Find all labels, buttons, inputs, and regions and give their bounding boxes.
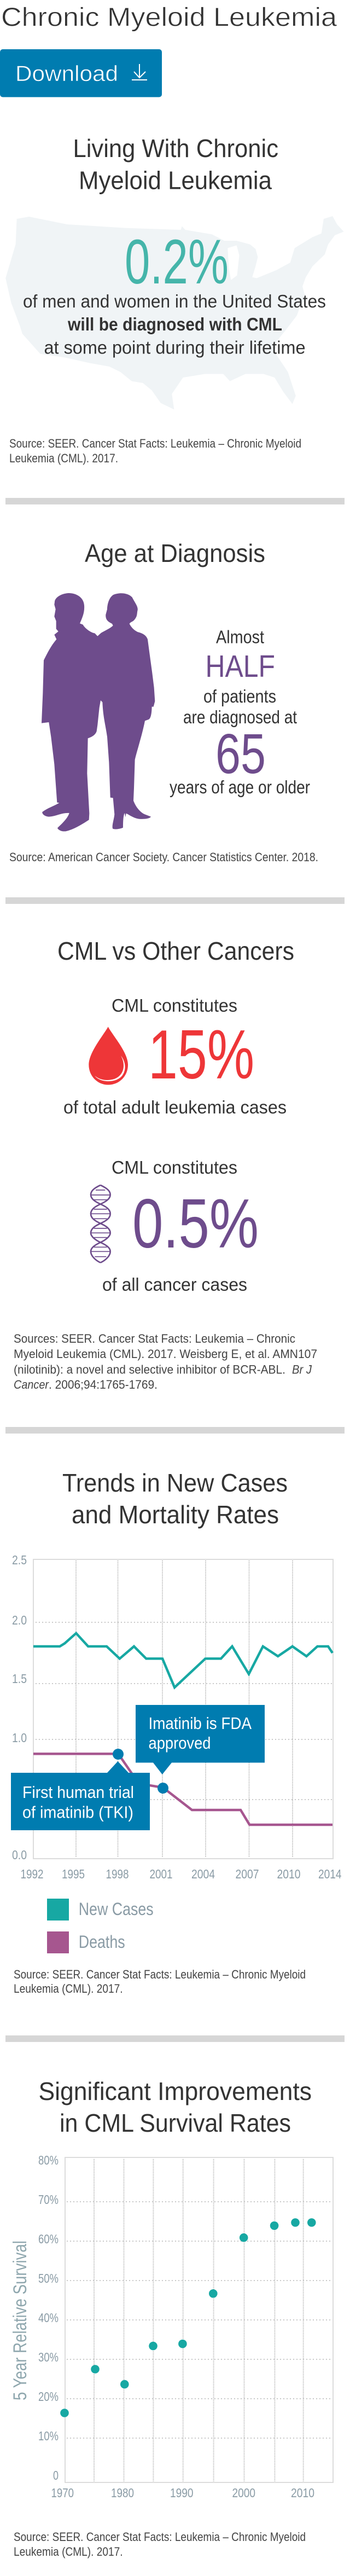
legend bbox=[47, 1899, 154, 1953]
label: CML constitutes: CML constitutes bbox=[112, 1157, 237, 1177]
x axis labels: 1980 bbox=[111, 2486, 134, 2500]
line: deaths bbox=[33, 1754, 332, 1825]
y axis labels: 0 bbox=[53, 2468, 59, 2482]
heading: survival rates bbox=[38, 2077, 312, 2137]
y axis labels: 1.0 bbox=[12, 1731, 27, 1745]
y axis labels: 40% bbox=[38, 2311, 59, 2325]
legend: New Cases bbox=[79, 1899, 154, 1919]
callout: first human trial: First human trial bbox=[22, 1783, 134, 1802]
x axis labels: 2004 bbox=[191, 1867, 215, 1881]
icon: silhouette of older couple bbox=[42, 593, 155, 831]
x axis labels: 2001 bbox=[150, 1867, 173, 1881]
caption: adult leukemia cases: of total adult leukemia cases bbox=[63, 1097, 287, 1117]
callout: first human trial bbox=[11, 1749, 150, 1830]
heading: living with CML: Myeloid Leukemia bbox=[79, 166, 272, 195]
x axis labels bbox=[21, 1867, 342, 1881]
callout: first human trial: of imatinib (TKI) bbox=[22, 1802, 133, 1822]
statistic text block: Almost bbox=[216, 627, 264, 647]
callout: imatinib FDA approved: approved bbox=[149, 1733, 211, 1753]
y axis labels: 50% bbox=[38, 2271, 59, 2285]
panel: age at diagnosis bbox=[9, 539, 318, 864]
y axis labels: 10% bbox=[38, 2429, 59, 2443]
panel: survival rates bbox=[10, 2077, 333, 2558]
source note bbox=[14, 2530, 306, 2558]
heading: survival rates: Significant Improvements bbox=[38, 2077, 312, 2105]
heading: age at diagnosis: Age at Diagnosis bbox=[85, 539, 265, 567]
source note: Cancer bbox=[14, 1378, 50, 1391]
heading: survival rates: in CML Survival Rates bbox=[60, 2109, 291, 2137]
x axis labels: 2000 bbox=[232, 2486, 255, 2500]
x axis labels: 1970 bbox=[51, 2486, 74, 2500]
source note bbox=[9, 437, 301, 465]
source note: Source: SEER. Cancer Stat Facts: Leukemia – Chronic Myeloid bbox=[14, 2530, 306, 2544]
heading: living with CML bbox=[73, 134, 278, 195]
source note: Leukemia (CML). 2017. bbox=[14, 2545, 122, 2558]
x axis labels: 1992 bbox=[21, 1867, 44, 1881]
callout: imatinib FDA approved bbox=[136, 1705, 265, 1794]
heading: trends: Trends in New Cases bbox=[62, 1469, 288, 1497]
source note: . 2006;94:1765-1769. bbox=[49, 1378, 158, 1391]
source note bbox=[14, 1968, 306, 1995]
line chart: new cases and deaths bbox=[12, 1553, 342, 1881]
statistic: 0.5%: 0.5% bbox=[132, 1185, 259, 1262]
callout: imatinib FDA approved: Imatinib is FDA bbox=[149, 1714, 252, 1733]
map of the United States bbox=[5, 216, 344, 409]
heading: CML vs other cancers: CML vs Other Cancers bbox=[57, 937, 294, 965]
panel: trends in new cases and mortality bbox=[11, 1469, 342, 1995]
page title: Chronic Myeloid Leukemia bbox=[1, 3, 337, 32]
caption: all cancer cases: of all cancer cases bbox=[102, 1274, 247, 1295]
x axis labels bbox=[51, 2486, 314, 2500]
download button: Download bbox=[15, 62, 118, 86]
legend: Deaths bbox=[79, 1932, 125, 1952]
description text: will be diagnosed with CML bbox=[67, 314, 282, 334]
y axis labels: 20% bbox=[38, 2389, 59, 2404]
y axis labels: 2.0 bbox=[12, 1613, 27, 1627]
y axis labels bbox=[12, 1553, 27, 1862]
y axis labels: 80% bbox=[38, 2153, 59, 2167]
source note: (nilotinib): a novel and selective inhibitor of BCR-ABL. bbox=[14, 1362, 285, 1377]
icon: DNA helix bbox=[91, 1185, 110, 1263]
y axis labels: 0.0 bbox=[12, 1848, 27, 1862]
heading: trends bbox=[62, 1469, 288, 1529]
x axis labels: 2010 bbox=[277, 1867, 301, 1881]
y axis labels: 30% bbox=[38, 2350, 59, 2364]
x axis labels: 2010 bbox=[291, 2486, 314, 2500]
source note: Leukemia (CML). 2017. bbox=[14, 1982, 122, 1995]
statistic text block: HALF bbox=[206, 649, 275, 684]
statistic text block: years of age or older bbox=[170, 777, 310, 797]
heading: living with CML: Living With Chronic bbox=[73, 134, 278, 163]
x axis labels: 1995 bbox=[62, 1867, 85, 1881]
panel: living with CML bbox=[5, 134, 344, 465]
statistic text block: 65 bbox=[215, 722, 266, 785]
statistic: 15%: 15% bbox=[148, 1016, 254, 1093]
statistic text block: are diagnosed at bbox=[183, 707, 297, 727]
source note: Leukemia (CML). 2017. bbox=[9, 451, 118, 465]
source note: Sources: SEER. Cancer Stat Facts: Leukemia – Chronic bbox=[14, 1332, 295, 1345]
statistic text block bbox=[170, 627, 310, 797]
source note: Source: SEER. Cancer Stat Facts: Leukemia – Chronic Myeloid bbox=[9, 437, 301, 450]
x axis labels: 1990 bbox=[170, 2486, 194, 2500]
label: CML constitutes: CML constitutes bbox=[112, 995, 237, 1016]
description text bbox=[23, 291, 326, 358]
y axis labels: 2.5 bbox=[12, 1553, 27, 1567]
source note: Myeloid Leukemia (CML). 2017. Weisberg E, et al. AMN107 bbox=[14, 1347, 317, 1361]
y axis labels: 1.5 bbox=[12, 1672, 27, 1686]
statistic: 0.2%: 0.2% bbox=[125, 227, 229, 297]
download button bbox=[0, 49, 162, 97]
x axis labels: 2007 bbox=[235, 1867, 259, 1881]
data points bbox=[60, 2218, 316, 2417]
statistic text block: of patients bbox=[203, 686, 276, 706]
y axis labels: 60% bbox=[38, 2232, 59, 2246]
scatter chart: 5 year relative survival bbox=[10, 2153, 333, 2500]
x axis labels: 1998 bbox=[106, 1867, 129, 1881]
icon: blood drop bbox=[89, 1027, 128, 1085]
y axis title: 5 Year Relative Survival bbox=[10, 2241, 31, 2400]
description text: of men and women in the United States bbox=[23, 291, 326, 311]
description text: at some point during their lifetime bbox=[44, 337, 305, 358]
source note: Br J bbox=[292, 1362, 312, 1377]
x axis labels: 2014 bbox=[318, 1867, 342, 1881]
source note: Source: SEER. Cancer Stat Facts: Leukemia – Chronic Myeloid bbox=[14, 1968, 306, 1981]
panel: CML vs other cancers bbox=[14, 937, 317, 1391]
line: new cases bbox=[33, 1633, 332, 1687]
y axis labels bbox=[38, 2153, 59, 2482]
y axis labels: 70% bbox=[38, 2192, 59, 2207]
source note bbox=[14, 1332, 317, 1391]
heading: trends: and Mortality Rates bbox=[72, 1500, 279, 1529]
